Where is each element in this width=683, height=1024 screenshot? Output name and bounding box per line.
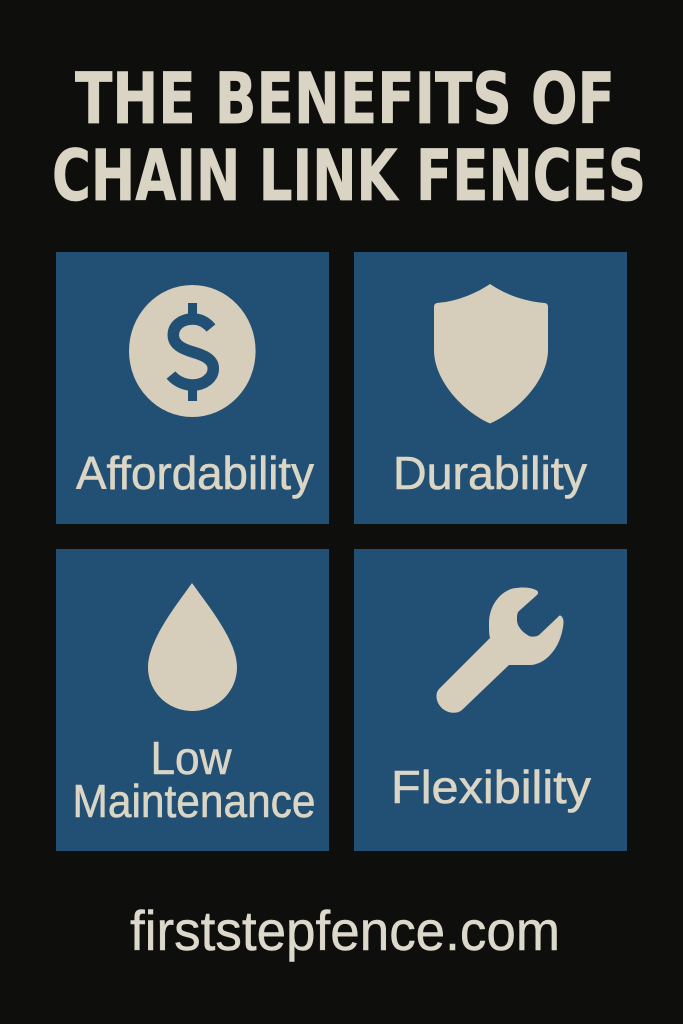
panel: durability <box>354 252 627 524</box>
label: low maintenance: Low <box>150 732 232 784</box>
label: low maintenance <box>72 732 316 827</box>
panel: affordability <box>56 252 329 524</box>
label: affordability: Affordability <box>76 447 314 499</box>
label: durability: Durability <box>393 447 587 499</box>
icon: shield <box>434 284 548 424</box>
title <box>52 58 646 217</box>
icon: water drop <box>148 583 237 711</box>
panel: low maintenance <box>56 549 329 851</box>
panel: flexibility <box>354 549 627 851</box>
icon: wrench <box>436 587 564 713</box>
label: low maintenance: Maintenance <box>72 775 316 827</box>
label: flexibility: Flexibility <box>391 761 591 813</box>
icon: dollar coin <box>129 285 256 417</box>
footer website: firststepfence.com <box>130 899 560 962</box>
